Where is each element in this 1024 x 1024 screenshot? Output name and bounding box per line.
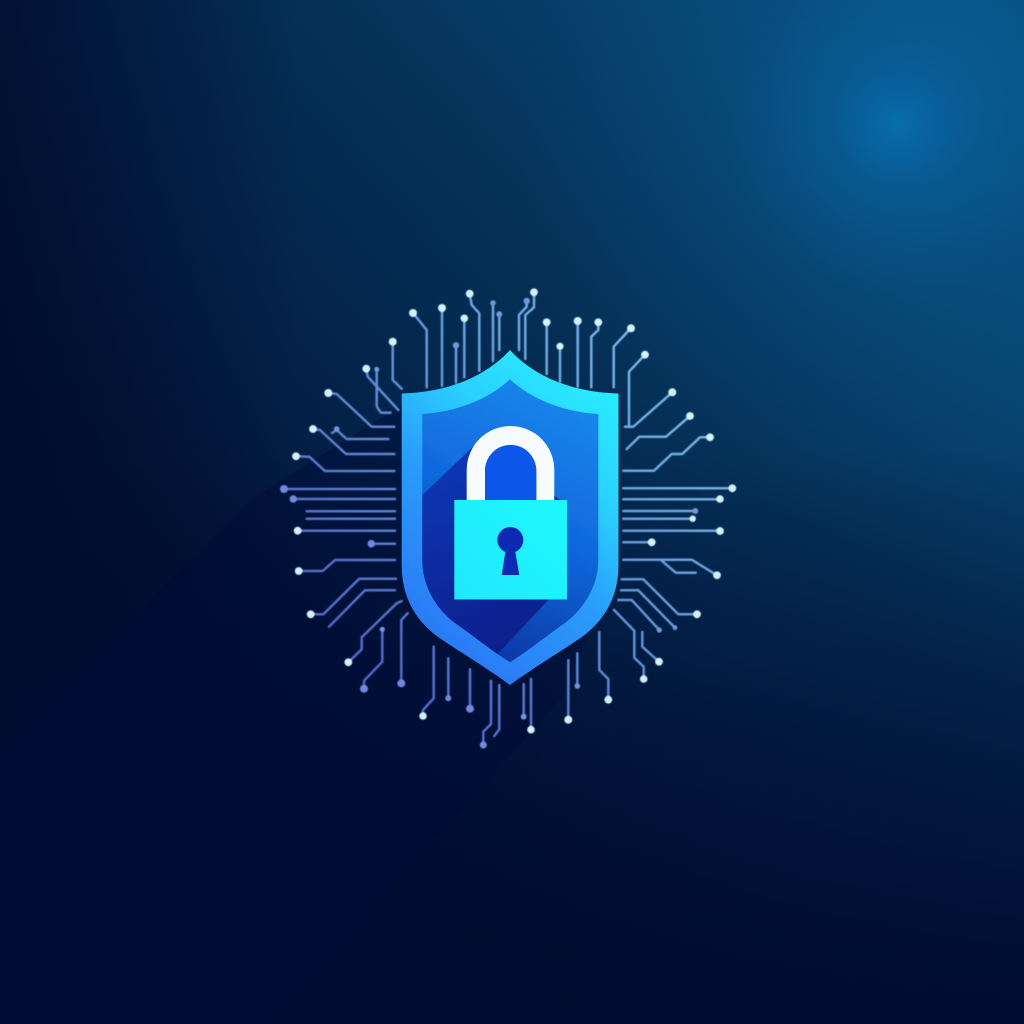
- shield inner panel: [422, 379, 598, 662]
- shield inner diagonal shadow: [422, 446, 560, 654]
- traces: top: [389, 288, 635, 389]
- long diagonal shadow behind emblem: [0, 400, 620, 1024]
- padlock shackle opening: [485, 445, 536, 500]
- padlock body: [454, 500, 567, 600]
- traces: lower left: [307, 579, 408, 693]
- padlock shackle: [467, 426, 554, 505]
- traces: bottom: [419, 632, 612, 749]
- traces: upper right: [623, 351, 714, 471]
- traces: lower right: [614, 579, 701, 683]
- traces: left: [280, 485, 395, 575]
- traces: upper left: [292, 365, 398, 471]
- traces: right: [623, 484, 736, 579]
- padlock keyhole: [497, 527, 523, 575]
- shield outer rim: [402, 350, 618, 685]
- circuit traces radiating around the shield: [280, 288, 736, 749]
- shield with padlock: [402, 350, 618, 685]
